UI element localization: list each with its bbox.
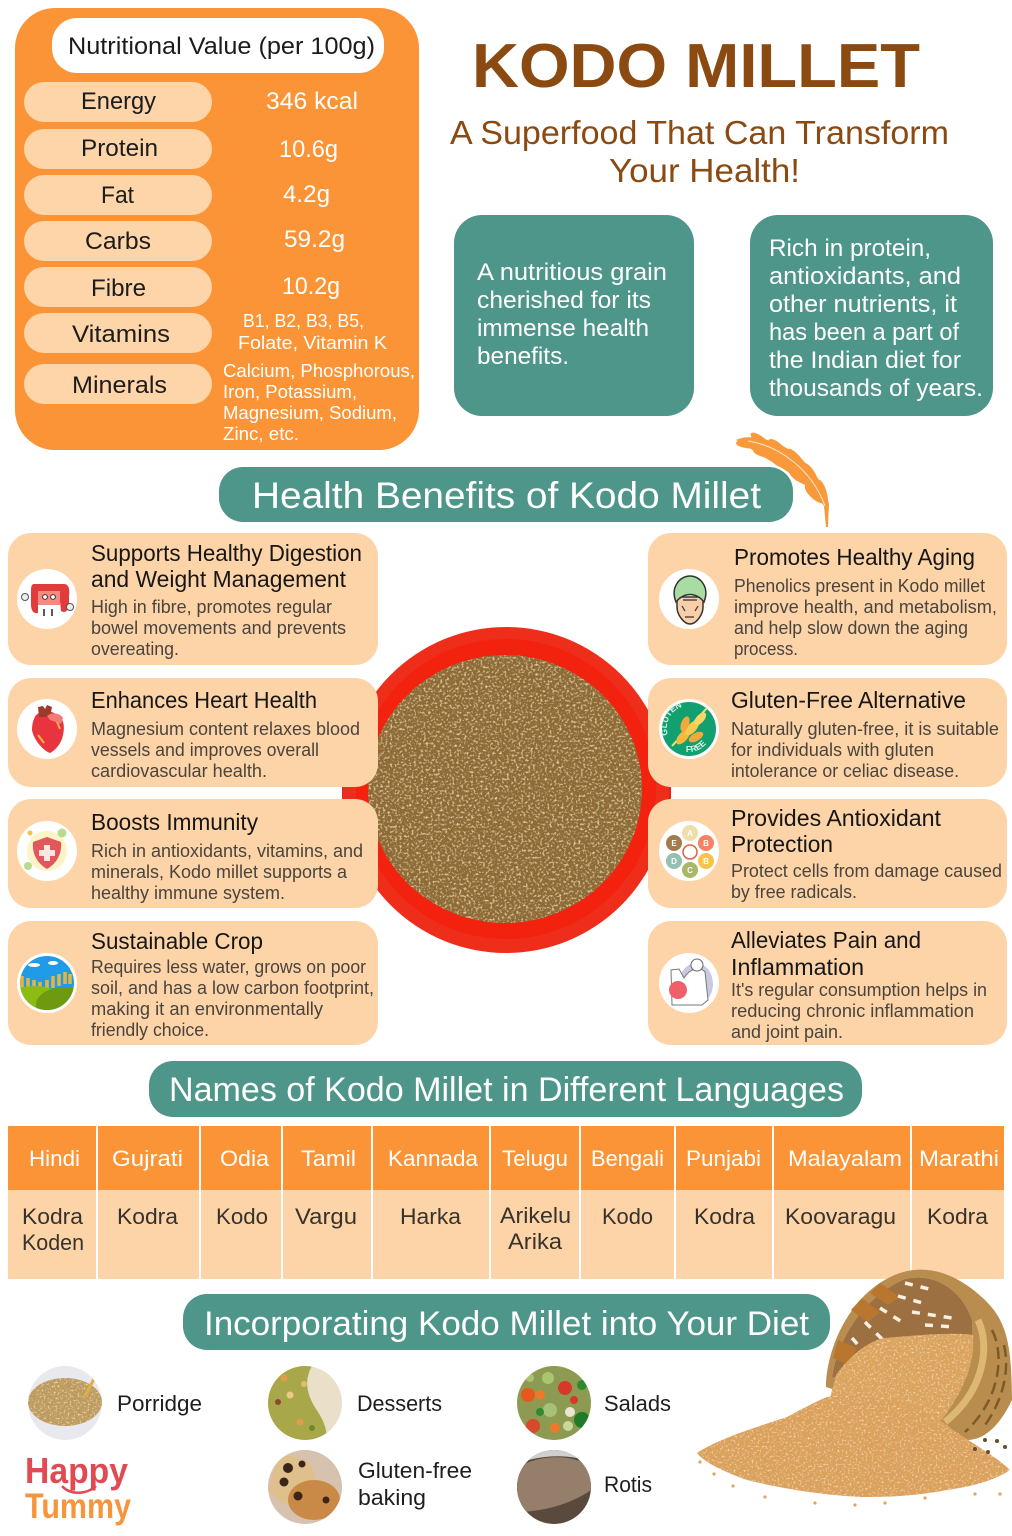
icon: vitamins wheel: D — [671, 857, 677, 866]
table: names by language: Arikelu — [500, 1203, 571, 1228]
panel: pain and inflammation: It's regular consumption helps in — [731, 980, 987, 1000]
panel: sustainable crop: Sustainable Crop — [91, 928, 263, 954]
panel: heart health: vessels and improves overall — [91, 740, 319, 760]
icon: back pain figure — [659, 953, 719, 1013]
panel: digestion: High in fibre, promotes regular — [91, 597, 332, 617]
panel: pain and inflammation: Inflammation — [731, 954, 864, 980]
icon: heart — [17, 699, 77, 759]
panel: nutritional value — [15, 8, 419, 450]
panel: digestion: overeating. — [91, 639, 179, 659]
food: gluten-free baking: baking — [358, 1485, 426, 1510]
icon: vitamins wheel: B — [703, 839, 709, 848]
panel: immunity: Rich in antioxidants, vitamins, and — [91, 841, 363, 861]
icon: vitamins wheel: A — [687, 829, 693, 838]
image: red bowl of kodo millet — [342, 627, 671, 953]
panel: heart health — [8, 678, 378, 787]
heading: health benefits: Health Benefits of Kodo Millet — [252, 475, 762, 516]
table: names by language: Koovaragu — [785, 1204, 896, 1229]
heading: names in languages — [149, 1061, 862, 1117]
row: vitamins: Vitamins — [72, 321, 170, 348]
logo: happy tummy — [25, 1450, 131, 1526]
panel: healthy aging: improve health, and metabolism, — [734, 597, 997, 617]
callout: nutritious grain — [454, 215, 694, 416]
panel: gluten free: for individuals with gluten — [731, 740, 934, 760]
panel: healthy aging: Phenolics present in Kodo millet — [734, 576, 985, 596]
row: vitamins: Folate, Vitamin K — [238, 332, 388, 353]
icon: gluten free badge — [659, 699, 719, 759]
panel: antioxidant — [648, 799, 1007, 908]
panel: digestion: bowel movements and prevents — [91, 618, 346, 638]
row: vitamins — [24, 310, 388, 353]
panel: pain and inflammation: reducing chronic inflammation — [731, 1001, 974, 1021]
food: gluten-free baking: Gluten-free — [358, 1458, 472, 1483]
callout: rich in protein: thousands of years. — [769, 375, 983, 402]
icon: elderly face — [659, 569, 719, 629]
icon: vitamins wheel — [659, 821, 719, 881]
panel: sustainable crop — [2, 921, 378, 1045]
panel: healthy aging — [648, 533, 1007, 665]
callout: rich in protein: other nutrients, it — [769, 291, 957, 318]
heading: names in languages: Names of Kodo Millet in Different Languages — [169, 1071, 844, 1109]
table: names by language: Kodra — [117, 1204, 178, 1229]
row: energy — [24, 82, 358, 122]
food: salads — [517, 1366, 671, 1440]
table: names by language: Hindi — [29, 1146, 80, 1171]
panel: pain and inflammation — [648, 921, 1007, 1045]
table: names by language: Telugu — [502, 1146, 568, 1171]
icon: gluten free badge: FREE — [686, 740, 706, 752]
row: energy: 346 kcal — [266, 88, 358, 115]
panel: gluten free — [648, 678, 1007, 787]
panel: digestion — [8, 533, 378, 665]
food: porridge — [28, 1366, 202, 1440]
row: minerals: Minerals — [72, 372, 167, 399]
food: desserts — [268, 1366, 442, 1440]
icon: vitamins wheel: B — [703, 857, 709, 866]
row: minerals: Iron, Potassium, — [223, 381, 357, 402]
table: names by language: Kodra — [694, 1204, 755, 1229]
row: fat: Fat — [101, 182, 134, 209]
row: fat: 4.2g — [283, 181, 330, 208]
food: salads: Salads — [604, 1391, 671, 1416]
row: minerals: Zinc, etc. — [223, 423, 299, 444]
panel: sustainable crop: soil, and has a low carbon footprint, — [91, 978, 374, 998]
table: names by language: Punjabi — [686, 1146, 761, 1171]
table: names by language — [8, 1126, 1004, 1279]
food: gluten-free baking — [268, 1450, 472, 1524]
callout: rich in protein — [750, 215, 993, 416]
row: fibre: Fibre — [91, 275, 146, 302]
table: names by language: Kodo — [216, 1204, 268, 1229]
callout: nutritious grain: A nutritious grain — [477, 259, 667, 286]
row: fibre: 10.2g — [282, 273, 340, 300]
table: names by language: Odia — [220, 1146, 269, 1171]
panel: gluten free: Naturally gluten-free, it is suitable — [731, 719, 999, 739]
icon: farm field — [17, 953, 77, 1013]
row: minerals — [24, 360, 415, 444]
table: names by language: Gujrati — [112, 1146, 183, 1171]
panel: sustainable crop: making it an environmentally — [91, 999, 323, 1019]
table: names by language: Kodra — [22, 1204, 83, 1229]
panel: immunity: minerals, Kodo millet supports a — [91, 862, 348, 882]
panel: immunity: healthy immune system. — [91, 883, 285, 903]
table: names by language: Marathi — [919, 1146, 999, 1171]
table: names by language: Kannada — [388, 1146, 478, 1171]
table: names by language: Harka — [400, 1204, 461, 1229]
row: protein — [24, 129, 338, 169]
subtitle — [450, 114, 949, 189]
icon: vitamins wheel: E — [671, 839, 677, 848]
row: minerals: Magnesium, Sodium, — [223, 402, 397, 423]
food: desserts: Desserts — [357, 1391, 442, 1416]
table: names by language: Koden — [22, 1230, 84, 1255]
callout: nutritious grain: immense health — [477, 315, 649, 342]
panel: antioxidant: Provides Antioxidant — [731, 805, 942, 831]
panel: antioxidant: by free radicals. — [731, 882, 857, 902]
heading: incorporating into diet: Incorporating Kodo Millet into Your Diet — [204, 1305, 810, 1343]
row: carbs: Carbs — [85, 228, 151, 255]
table: names by language: Arika — [508, 1229, 563, 1254]
heading: incorporating into diet — [183, 1294, 830, 1350]
logo: happy tummy: Happy — [25, 1450, 128, 1491]
panel: sustainable crop: friendly choice. — [91, 1020, 209, 1040]
panel: digestion: and Weight Management — [91, 566, 347, 592]
subtitle: A Superfood That Can Transform — [450, 114, 949, 151]
panel: gluten free: intolerance or celiac disease. — [731, 761, 959, 781]
panel: immunity: Boosts Immunity — [91, 809, 258, 835]
panel: healthy aging: process. — [734, 639, 798, 659]
row: minerals: Calcium, Phosphorous, — [223, 360, 415, 381]
title: KODO MILLET — [472, 32, 920, 101]
panel: sustainable crop: Requires less water, grows on poor — [91, 957, 366, 977]
table: names by language: Vargu — [295, 1204, 357, 1229]
callout: rich in protein: antioxidants, and — [769, 263, 961, 290]
panel: healthy aging: and help slow down the aging — [734, 618, 968, 638]
panel: pain and inflammation: Alleviates Pain and — [731, 927, 921, 953]
icon: vitamins wheel: C — [687, 866, 693, 875]
icon: gluten free badge: GLUTEN — [660, 702, 682, 736]
panel: heart health: cardiovascular health. — [91, 761, 267, 781]
table: names by language: Kodo — [602, 1204, 653, 1229]
row: protein: Protein — [81, 135, 158, 162]
panel: healthy aging: Promotes Healthy Aging — [734, 544, 975, 570]
heading: health benefits — [219, 467, 793, 522]
callout: rich in protein: has been a part of — [769, 319, 959, 346]
panel: antioxidant: Protect cells from damage caused — [731, 861, 1002, 881]
logo: happy tummy: Tummy — [25, 1487, 131, 1526]
icon: intestine — [17, 569, 77, 629]
callout: rich in protein: the Indian diet for — [769, 347, 961, 374]
table: names by language: Bengali — [591, 1146, 664, 1171]
heading: nutritional value pill: Nutritional Value (per 100g) — [68, 33, 375, 60]
food: porridge: Porridge — [117, 1391, 202, 1416]
row: carbs: 59.2g — [284, 226, 345, 253]
table: names by language: Kodra — [927, 1204, 988, 1229]
panel: digestion: Supports Healthy Digestion — [91, 540, 362, 566]
row: protein: 10.6g — [279, 136, 338, 163]
panel: pain and inflammation: and joint pain. — [731, 1022, 843, 1042]
heading: nutritional value pill — [52, 18, 384, 73]
callout: rich in protein: Rich in protein, — [769, 235, 931, 262]
panel: immunity — [8, 799, 378, 908]
table: names by language: Tamil — [301, 1146, 356, 1171]
row: fat — [24, 175, 330, 215]
callout: nutritious grain: benefits. — [477, 343, 569, 370]
food: rotis — [517, 1450, 652, 1524]
callout: nutritious grain: cherished for its — [477, 287, 651, 314]
panel: heart health: Enhances Heart Health — [91, 687, 317, 713]
row: vitamins: B1, B2, B3, B5, — [243, 310, 364, 331]
panel: antioxidant: Protection — [731, 831, 833, 857]
subtitle: Your Health! — [609, 152, 800, 189]
row: energy: Energy — [81, 88, 156, 115]
icon: wheat ear — [736, 430, 830, 527]
table: names by language: Malayalam — [788, 1146, 902, 1171]
panel: heart health: Magnesium content relaxes blood — [91, 719, 360, 739]
row: fibre — [24, 267, 340, 307]
row: carbs — [24, 221, 345, 261]
image: basket spilling millet — [697, 1270, 1012, 1507]
food: rotis: Rotis — [604, 1472, 652, 1497]
panel: gluten free: Gluten-Free Alternative — [731, 687, 966, 713]
icon: shield — [17, 821, 77, 881]
